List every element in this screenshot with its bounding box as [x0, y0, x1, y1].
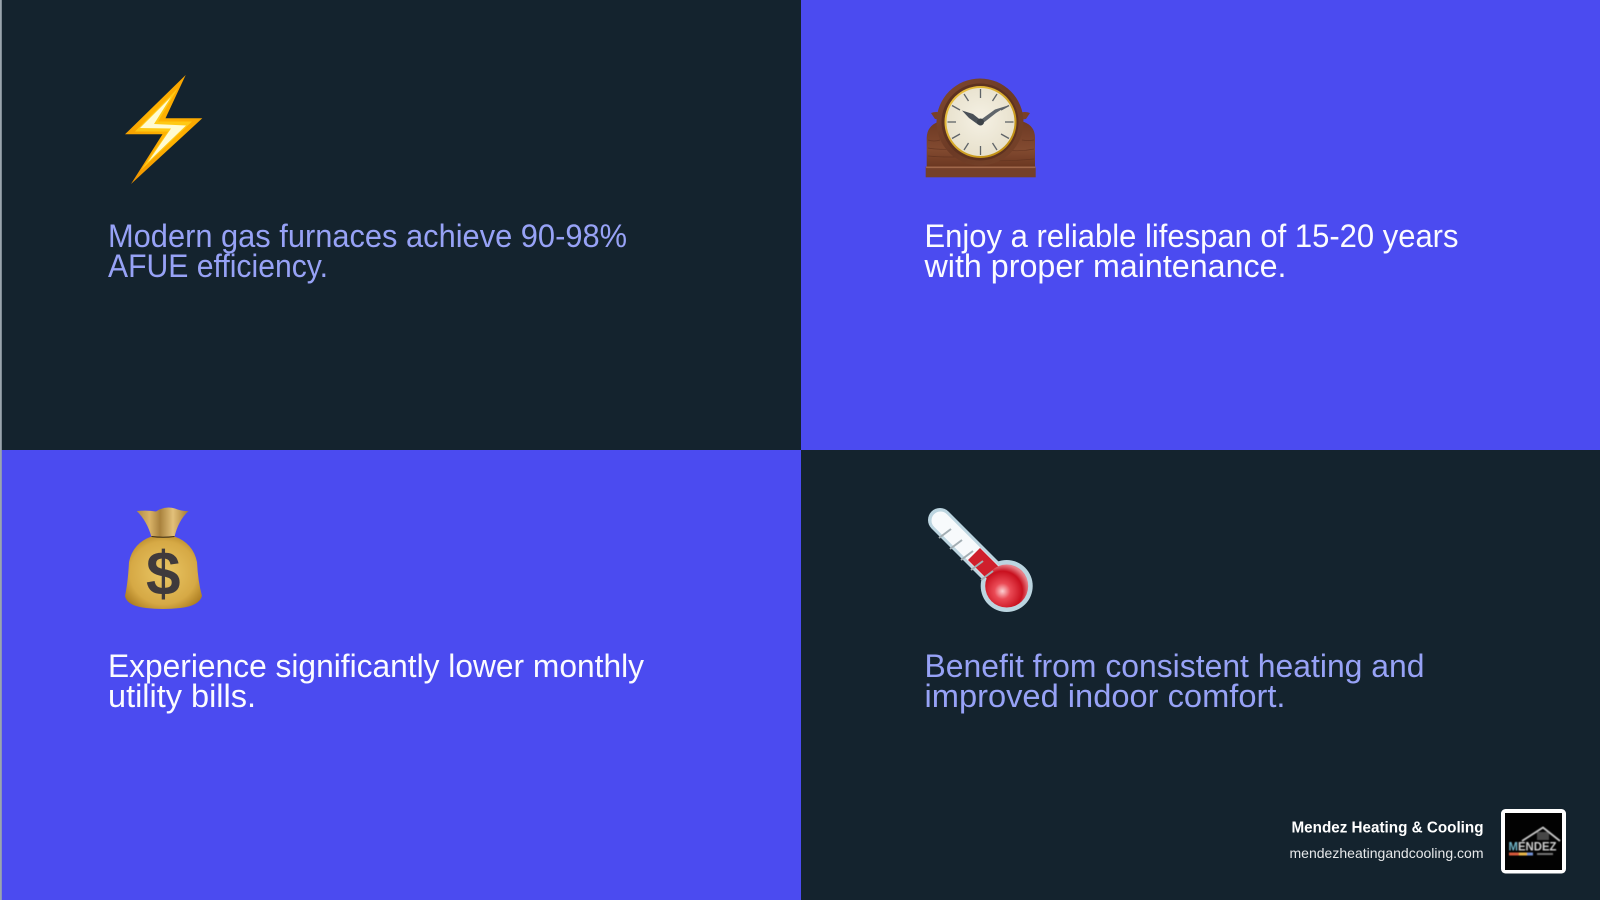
text: efficiency: Modern gas furnaces achieve 90-98% — [108, 218, 627, 254]
left edge strip — [0, 0, 2, 900]
logo badge — [1501, 809, 1566, 874]
icon: money bag — [125, 508, 202, 609]
text: savings: utility bills. — [108, 678, 256, 714]
text: comfort: improved indoor comfort. — [924, 678, 1286, 714]
panel: savings — [0, 450, 801, 900]
icon: thermometer — [939, 520, 1033, 612]
footer: website: mendezheatingandcooling.com — [1290, 845, 1484, 861]
icon: lightning bolt — [125, 75, 202, 184]
icon: mantel clock — [926, 78, 1036, 177]
text: lifespan: with proper maintenance. — [923, 248, 1286, 284]
text: comfort: Benefit from consistent heating and — [924, 648, 1424, 684]
text: lifespan: Enjoy a reliable lifespan of 15-20 years — [924, 218, 1458, 254]
icon: money bag: $ — [146, 540, 181, 609]
text: efficiency: AFUE efficiency. — [108, 248, 328, 284]
footer: company name: Mendez Heating & Cooling — [1292, 820, 1484, 836]
text: savings: Experience significantly lower monthly — [108, 648, 644, 684]
logo badge: MENDEZ — [1508, 842, 1556, 854]
panel: lifespan — [801, 0, 1600, 450]
panel: comfort — [801, 450, 1600, 900]
panel: efficiency — [0, 0, 801, 450]
